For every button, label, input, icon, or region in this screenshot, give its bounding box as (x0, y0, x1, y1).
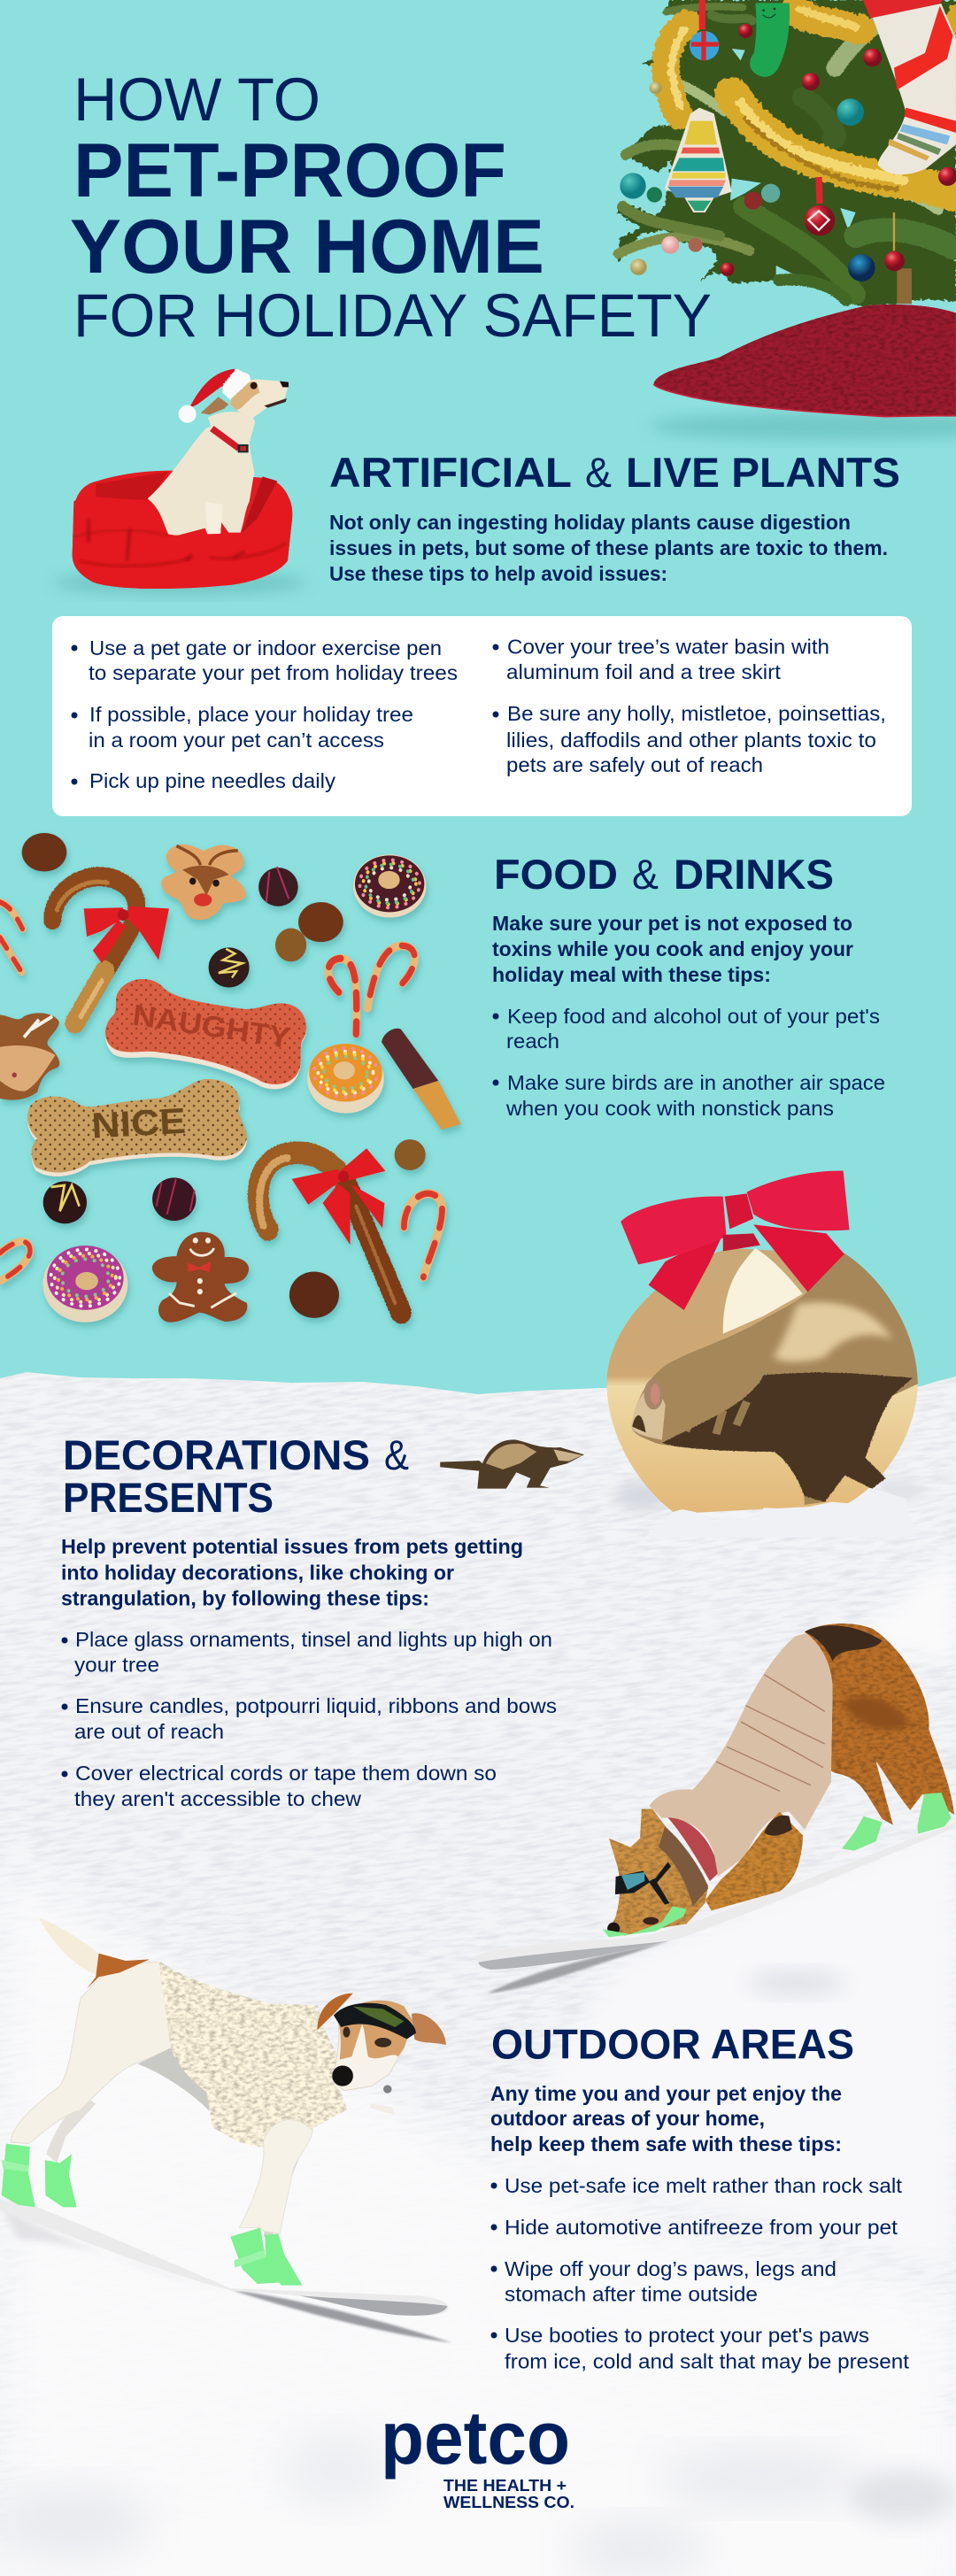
tips left column: If possible, place your holiday tree (89, 703, 413, 726)
naughty bone biscuit: NAUGHTY (131, 999, 293, 1054)
section heading: outdoor areas: OUTDOOR AREAS (491, 2020, 854, 2068)
tips: decorations: Place glass ornaments, tinsel and lights up high on (75, 1628, 552, 1651)
collar (212, 428, 239, 449)
tips left column: Pick up pine needles daily (89, 769, 336, 792)
tips: decorations: your tree (74, 1654, 159, 1677)
santa hat (189, 369, 236, 409)
snowboard (0, 2200, 449, 2316)
logo: petco: THE HEALTH + (443, 2476, 567, 2495)
front legs (239, 2120, 312, 2233)
tips: outdoor: stomach after time outside (505, 2282, 758, 2305)
tips left column: in a room your pet can’t access (89, 729, 384, 752)
section heading: artificial and live plants: & (585, 449, 612, 496)
logo: petco: WELLNESS CO. (443, 2493, 574, 2511)
intro text: outdoor (490, 2082, 842, 2156)
intro text: plants: Not only can ingesting holiday plants cause digestion (329, 511, 851, 534)
tree foliage (617, 0, 956, 307)
tips: outdoor: from ice, cold and salt that may be present (505, 2349, 910, 2372)
intro text: food: Make sure your pet is not exposed to (492, 912, 852, 935)
section heading: artificial and live plants (329, 449, 900, 496)
brown patch (87, 1954, 150, 1989)
tips: food: when you cook with nonstick pans (505, 1097, 834, 1120)
ornaments: baubles (620, 0, 956, 282)
pretzel candy cane with bow (258, 1153, 401, 1313)
tips right column: pets are safely out of reach (506, 753, 763, 776)
ferret reflection (631, 1253, 918, 1505)
panel: plant tips card (52, 616, 912, 816)
pink sprinkled donut (42, 1246, 127, 1323)
section heading: artificial and live plants: ARTIFICIAL (329, 449, 572, 496)
title (70, 66, 712, 350)
snow over egg base (645, 1490, 916, 1538)
illustration: holiday treats spread (0, 833, 461, 1323)
truffles (43, 1177, 196, 1223)
intro text: plants: Use these tips to help avoid issues: (329, 562, 667, 585)
illustration: dog in knit sweater on snowboard (0, 1918, 451, 2343)
belly (138, 2048, 210, 2111)
nice bone biscuit (27, 1079, 247, 1176)
cookie (289, 1272, 339, 1318)
front legs and chest (705, 1812, 803, 1910)
tips: outdoor: Wipe off your dog’s paws, legs and (505, 2257, 836, 2280)
illustration: small ferret (440, 1439, 584, 1489)
orange sprinkled donut (307, 1044, 384, 1114)
tail (39, 1918, 99, 1976)
intro text: decorations (61, 1535, 523, 1609)
tips left column (71, 636, 458, 792)
tips: decorations: they aren't accessible to chew (74, 1787, 361, 1810)
tips: decorations: Cover electrical cords or tape them down so (75, 1762, 497, 1785)
section heading: artificial and live plants: LIVE PLANTS (626, 449, 900, 496)
illustration: ferret in golden ornament with red bow (607, 1171, 923, 1538)
dog body (148, 412, 255, 536)
tips right column: aluminum foil and a tree skirt (506, 660, 782, 683)
logo: petco: petco (381, 2396, 570, 2480)
tips: decorations: are out of reach (74, 1720, 224, 1743)
red bed back (73, 471, 292, 589)
intro text: food: toxins while you cook and enjoy your (492, 937, 853, 960)
dog head (230, 379, 289, 419)
intro text: food (492, 912, 853, 986)
intro text: decorations: Help prevent potential issues from pets getting (61, 1535, 523, 1558)
tips right column: Cover your tree’s water basin with (507, 636, 829, 659)
tips: outdoor (490, 2174, 910, 2372)
intro text: decorations: strangulation, by following these tips: (61, 1586, 429, 1609)
chocolate sprinkled donut (353, 854, 426, 918)
tips left column: Use a pet gate or indoor exercise pen (89, 636, 442, 659)
section heading: decorations and presents: PRESENTS (63, 1474, 274, 1521)
intro text: outdoor: help keep them safe with these tips: (490, 2133, 842, 2156)
candy canes (0, 902, 442, 1280)
intro text: outdoor: Any time you and your pet enjoy the (490, 2082, 842, 2105)
title: FOR HOLIDAY SAFETY (73, 282, 712, 350)
red bow (292, 1148, 385, 1245)
tips: decorations (62, 1628, 557, 1810)
puffer jacket (650, 1633, 833, 1877)
board shadow (230, 2290, 451, 2343)
pretzel candy cane with bow (52, 876, 136, 1022)
red bow (84, 906, 169, 963)
partial reindeer cookie (0, 1013, 59, 1100)
far legs (46, 2095, 96, 2163)
title: HOW TO (73, 66, 320, 134)
tips: food: Make sure birds are in another air space (507, 1071, 885, 1094)
panel: snow ground (0, 1372, 956, 2576)
dog body (11, 1962, 173, 2144)
section heading: decorations and presents: & (384, 1431, 409, 1478)
illustration: dog in santa hat sitting in red bed (53, 369, 307, 595)
tips: decorations: Ensure candles, potpourri liquid, ribbons and bows (75, 1694, 557, 1717)
bone tag (370, 2104, 395, 2114)
title: PET-PROOF (73, 128, 506, 213)
intro text: decorations: into holiday decorations, like choking or (61, 1562, 454, 1585)
golden egg (607, 1248, 918, 1514)
cookie (298, 902, 343, 942)
head (332, 2001, 413, 2091)
dog head (609, 1809, 708, 1936)
tips right column: lilies, daffodils and other plants toxic to (506, 729, 876, 752)
ornament: white and red stocking (863, 0, 956, 174)
illustration: dog in puffer jacket on snowboard (475, 1623, 956, 1994)
intro text: plants: issues in pets, but some of these plants are toxic to them. (329, 536, 888, 559)
tips right column (492, 636, 886, 776)
tips: food: reach (506, 1030, 559, 1053)
tips right column: Be sure any holly, mistletoe, poinsettias, (507, 702, 886, 725)
section heading: food and drinks: FOOD (494, 851, 618, 898)
title: YOUR HOME (70, 204, 544, 289)
section heading: food and drinks (494, 851, 834, 898)
tips: outdoor: Use booties to protect your pet's paws (505, 2324, 869, 2347)
section heading: food and drinks: DRINKS (674, 851, 834, 898)
tips: food (492, 1005, 885, 1120)
tips: outdoor: Use pet-safe ice melt rather than rock salt (505, 2174, 903, 2197)
intro text: food: holiday meal with these tips: (492, 963, 771, 986)
rear fur (805, 1623, 954, 1825)
reindeer cookie (161, 845, 246, 920)
tips: food: Keep food and alcohol out of your pet's (507, 1005, 880, 1028)
section heading: food and drinks: & (632, 851, 659, 898)
gingerbread man (152, 1232, 249, 1323)
truffle (258, 867, 298, 906)
red bed front rim (73, 493, 292, 589)
naughty bone biscuit (105, 979, 306, 1089)
gold tinsel garland (666, 9, 956, 195)
illustration: christmas tree with ornaments and skirt (617, 0, 956, 440)
tips left column: to separate your pet from holiday trees (89, 661, 458, 684)
green booties (603, 1793, 952, 1937)
section heading: decorations and presents (63, 1431, 409, 1521)
biscuit ball (395, 1139, 426, 1170)
tips: outdoor: Hide automotive antifreeze from your pet (505, 2216, 898, 2239)
green booties (2, 2144, 302, 2286)
ornament: green pickle toy (750, 3, 790, 77)
ornament: patterned tree toy (665, 108, 732, 212)
biscuit ball (275, 929, 306, 961)
tree skirt (653, 305, 956, 417)
snowboard (475, 1822, 956, 1970)
goggles (615, 1862, 671, 1905)
red bow (621, 1171, 850, 1310)
intro text: plants (329, 511, 888, 585)
knit sweater (158, 1961, 347, 2148)
nice bone biscuit: NICE (90, 1100, 187, 1146)
section heading: decorations and presents: DECORATIONS (63, 1431, 370, 1478)
intro text: outdoor: outdoor areas of your home, (490, 2107, 765, 2130)
board shadow (488, 1941, 668, 1994)
truffle with tree icing (209, 947, 250, 987)
cookie (22, 833, 66, 872)
chocolate stick (382, 1029, 461, 1130)
red scarf lining (668, 1817, 718, 1881)
